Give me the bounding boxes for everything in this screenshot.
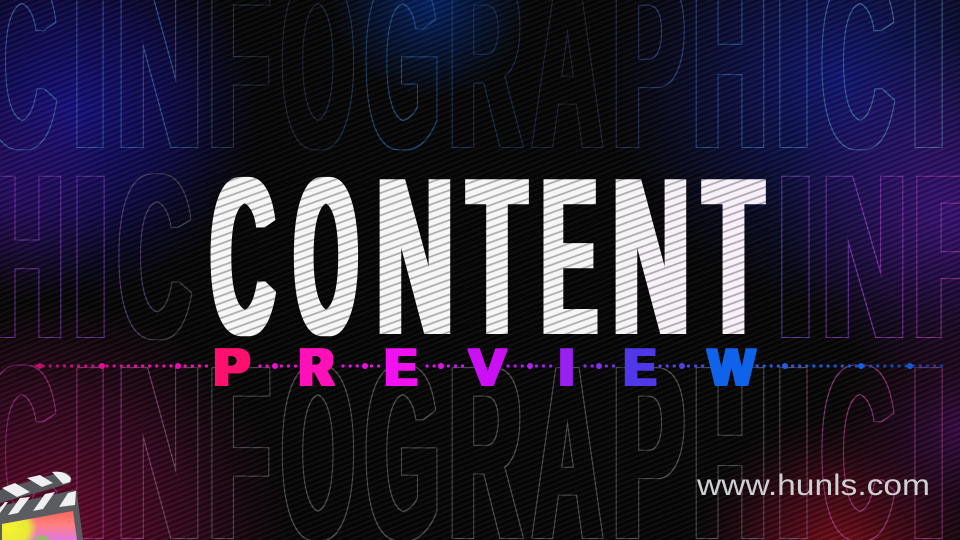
title: CONTENT: C — [211, 130, 275, 382]
dotted divider line — [36, 363, 945, 369]
clapper body — [0, 490, 83, 540]
title: CONTENT: N — [376, 130, 453, 382]
clapper top arm — [0, 472, 72, 503]
outlined word row: middle — [0, 127, 960, 387]
icon: clapperboard — [0, 472, 83, 540]
subtitle: PREVIEW — [214, 339, 756, 397]
subtitle: PREVIEW: P — [214, 339, 249, 397]
subtitle: PREVIEW: V — [469, 339, 506, 397]
subtitle: PREVIEW: E — [386, 339, 416, 397]
subtitle: PREVIEW: W — [708, 339, 756, 397]
outlined word row: top — [0, 0, 948, 200]
infographic canvas: T — [704, 130, 763, 382]
subtitle: PREVIEW: E — [625, 339, 655, 397]
title: CONTENT: N — [612, 130, 689, 382]
final cut colour panel — [2, 511, 77, 540]
clapper stripes — [0, 491, 76, 515]
title: CONTENT — [211, 130, 763, 382]
outlined word row: bottom — [0, 315, 948, 540]
outlined word row: middle: C — [118, 127, 191, 387]
title: CONTENT: O — [294, 130, 358, 382]
subtitle: PREVIEW: I — [560, 339, 573, 397]
outlined word row: middle: I — [776, 127, 815, 387]
outlined word row: middle: I — [71, 127, 110, 387]
title: CONTENT: T — [468, 130, 526, 382]
title: CONTENT: E — [542, 130, 597, 382]
website url: www.hunls.com — [696, 469, 930, 502]
subtitle: PREVIEW: R — [300, 339, 333, 397]
